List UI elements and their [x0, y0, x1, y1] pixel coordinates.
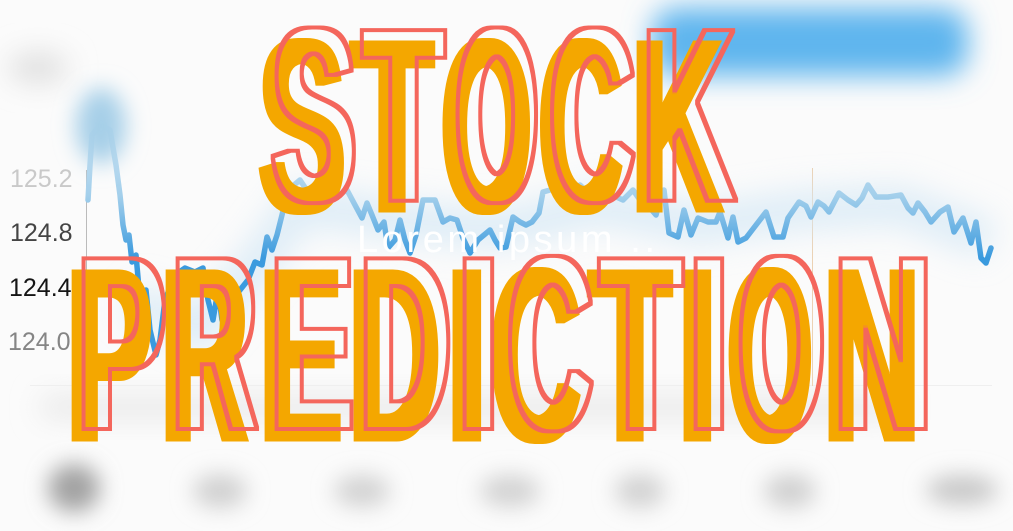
word: PREDICTION outline: R [174, 205, 255, 482]
blurred label 1 [48, 464, 100, 512]
blurred date labels row [48, 464, 998, 512]
blurred grey header label [8, 53, 68, 83]
blurred label 3 [334, 475, 390, 507]
word: STOCK outline [273, 0, 733, 254]
label 124.0: 124.0 [8, 328, 71, 356]
word: PREDICTION outline [79, 204, 931, 483]
word: PREDICTION outline: C [509, 205, 591, 482]
baseline [30, 384, 992, 386]
chart glow [130, 205, 990, 330]
blurred label 5 [615, 474, 665, 508]
blurred blue value marker [76, 88, 126, 164]
label 124.4: 124.4 [9, 274, 72, 302]
label 124.8: 124.8 [10, 219, 73, 247]
word: PREDICTION fill: D [349, 215, 440, 495]
title: coral outline layer [79, 0, 931, 483]
blurred label 2 [193, 474, 247, 508]
word: STOCK fill [259, 0, 722, 267]
word: PREDICTION outline: T [601, 205, 681, 482]
word: PREDICTION fill: C [491, 215, 580, 495]
y axis labels [8, 165, 73, 356]
word: PREDICTION outline: N [836, 205, 931, 483]
blurred placeholder caption: Lorem ipsum .. [357, 219, 655, 261]
word: PREDICTION fill: O [728, 215, 812, 495]
word: PREDICTION outline: P [79, 204, 164, 482]
word: PREDICTION fill: I [678, 215, 716, 495]
blurred grey band below chart [40, 396, 900, 418]
word: PREDICTION fill: T [589, 217, 671, 495]
blurred label 6 [764, 474, 816, 508]
word: PREDICTION outline: O [740, 205, 823, 482]
word: PREDICTION outline: I [460, 206, 497, 482]
word: PREDICTION fill: I [447, 217, 487, 496]
y axis line [86, 170, 88, 270]
title: orange fill layer [67, 0, 920, 496]
price line chart [88, 125, 991, 355]
word: PREDICTION fill: N [824, 217, 920, 495]
marker line [812, 168, 814, 386]
word: PREDICTION outline: D [362, 206, 449, 482]
blurred label 7 [926, 475, 998, 505]
word: PREDICTION fill [67, 215, 920, 496]
label 125.2: 125.2 [10, 165, 73, 193]
word: PREDICTION fill: R [162, 217, 247, 495]
blurred label 4 [480, 475, 540, 507]
word: PREDICTION outline: E [273, 206, 352, 483]
blurred blue button top right [652, 8, 968, 76]
word: PREDICTION outline: I [691, 204, 727, 482]
word: PREDICTION fill: P [67, 216, 151, 495]
word: PREDICTION fill: E [260, 215, 341, 495]
